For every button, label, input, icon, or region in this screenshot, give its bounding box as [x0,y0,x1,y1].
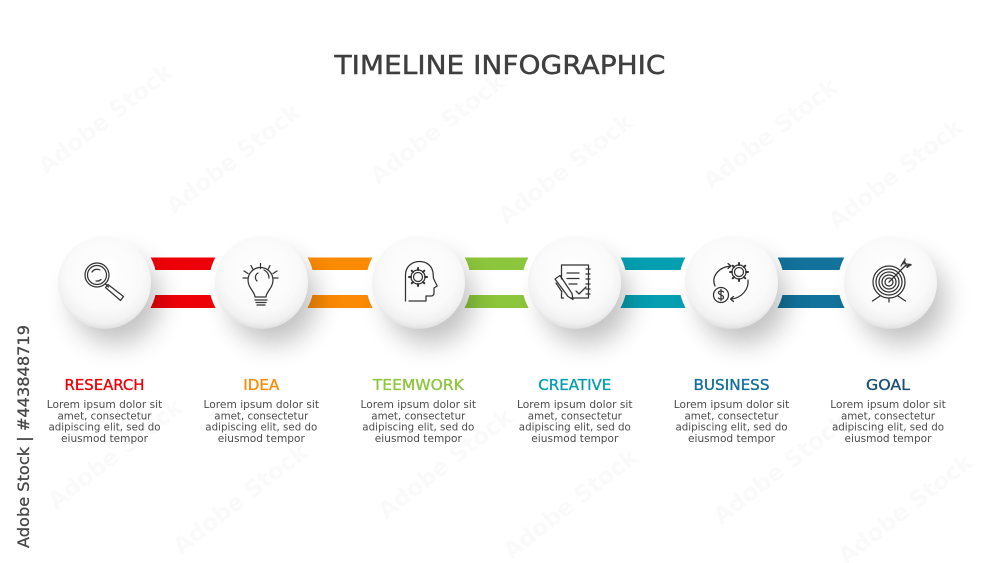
watermark: Adobe Stock [169,439,313,560]
node 1 circle [52,230,160,344]
connector: green [454,258,534,308]
step 1: research [47,376,162,445]
step 4: creative: amet, consectetur [528,410,622,422]
step 6: goal: amet, consectetur [841,410,936,422]
icon: head with gear [406,262,437,301]
step 6: goal: adipiscing elit, sed do [832,422,944,434]
step 4: creative: Lorem ipsum dolor sit [517,399,633,411]
step 2: idea: adipiscing elit, sed do [205,422,317,434]
step 2: idea: Lorem ipsum dolor sit [204,399,319,411]
step 4: creative: eiusmod tempor [531,433,619,445]
step 1: research: RESEARCH [64,376,144,394]
step 2: idea: amet, consectetur [214,410,309,422]
step 5: business: BUSINESS [694,376,770,394]
step 5: business: eiusmod tempor [688,433,776,445]
connector: red [140,258,220,308]
step 1: research: eiusmod tempor [61,433,149,445]
step 4: creative [517,376,633,445]
watermark: Adobe Stock [366,69,510,190]
watermark: Adobe Stock [499,444,643,563]
step 5: business: adipiscing elit, sed do [676,422,788,434]
connector: blue [767,258,847,308]
step 1: research: adipiscing elit, sed do [48,422,160,434]
step 3: teemwork [361,376,476,445]
step 2: idea [204,376,319,445]
step 3: teemwork: TEEMWORK [372,376,465,394]
watermark: Adobe Stock [824,114,968,235]
icon: gear and coin cycle [714,263,748,302]
step 5: business: amet, consectetur [684,410,779,422]
watermark: Adobe Stock [699,74,843,195]
side credit: Adobe Stock | #443848719 [14,325,33,548]
step 3: teemwork: adipiscing elit, sed do [362,422,474,434]
step 2: idea: IDEA [243,376,280,394]
title: TIMELINE INFOGRAPHIC [333,51,666,81]
step 5: business: Lorem ipsum dolor sit [674,399,789,411]
step 3: teemwork: amet, consectetur [371,410,466,422]
step 6: goal [830,376,946,445]
connector: orange [297,258,377,308]
node 5 circle [679,230,787,344]
icon: magnifier [85,263,124,300]
step 3: teemwork: Lorem ipsum dolor sit [361,399,476,411]
icon: light bulb [243,264,278,305]
step 1: research: Lorem ipsum dolor sit [47,399,162,411]
icon: target with arrow [872,259,911,302]
step 6: goal: eiusmod tempor [844,433,932,445]
step 3: teemwork: eiusmod tempor [375,433,462,445]
watermark: Adobe Stock [494,109,638,230]
icon: notebook and pen [555,265,590,300]
watermark: Adobe Stock [374,404,518,525]
connector: teal [610,258,690,308]
watermark: Adobe Stock [162,99,306,220]
watermark: Adobe Stock [34,59,178,180]
step 5: business [674,376,789,445]
node 3 circle [366,230,474,344]
step 6: goal: Lorem ipsum dolor sit [830,399,946,411]
step 6: goal: GOAL [866,376,911,394]
node 2 circle [209,230,317,344]
step 1: research: amet, consectetur [58,410,152,422]
node 6 circle [838,230,946,344]
watermark: Adobe Stock [709,409,853,530]
node 4 circle [522,230,630,344]
step 2: idea: eiusmod tempor [218,433,305,445]
step 4: creative: CREATIVE [538,376,611,394]
watermark: Adobe Stock [44,394,188,515]
step 4: creative: adipiscing elit, sed do [519,422,631,434]
